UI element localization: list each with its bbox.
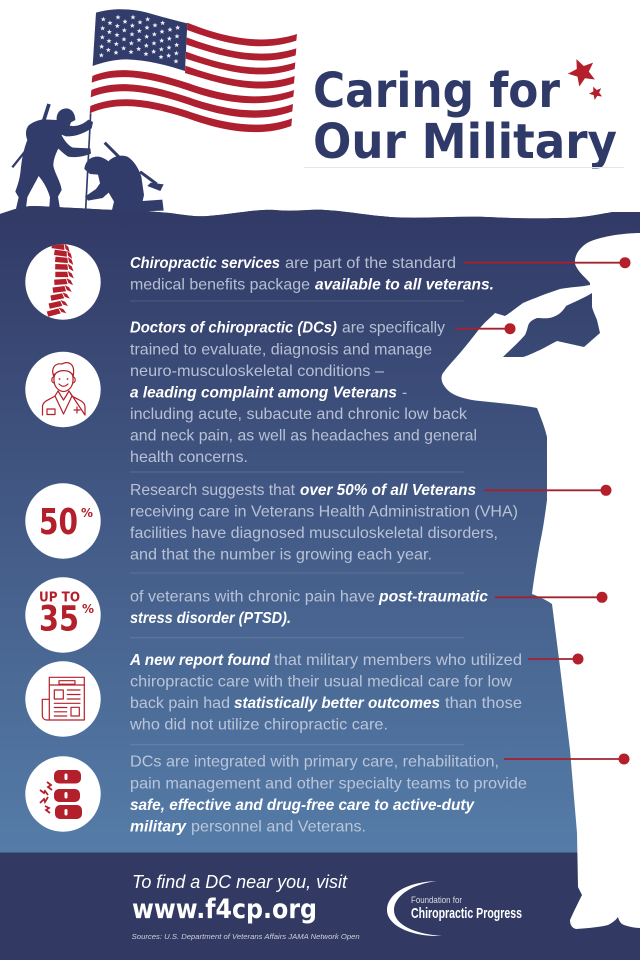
text: chiropractic services: medical benefits package <box>130 276 310 294</box>
logo: foundation for chiropractic progress: Chiropractic Progress <box>411 905 522 922</box>
ground hill <box>0 206 640 222</box>
panel: new report <box>25 652 584 737</box>
footer text: www.f4cp.org <box>132 894 317 925</box>
icon: up to 35 percent badge: UP TO <box>39 591 80 606</box>
text: doctors of chiropractic: are specifically <box>342 320 445 337</box>
red stars <box>568 59 602 100</box>
icon: doctor <box>25 352 101 427</box>
icon: up to 35 percent badge <box>25 577 101 653</box>
footer text <box>132 872 360 941</box>
text: new report: who did not utilize chiropractic care. <box>129 716 388 734</box>
soldier saluting silhouette <box>442 233 640 929</box>
text: research: over 50% of all Veterans <box>300 482 476 499</box>
icon: 50 percent badge: 50 <box>39 502 78 543</box>
icon: spine <box>25 242 101 320</box>
soldiers raising flag <box>12 104 164 212</box>
title underline <box>304 167 624 168</box>
text: ptsd: stress disorder (PTSD). <box>130 610 291 627</box>
panel: chiropractic services <box>25 242 631 320</box>
footer text: To find a DC near you, visit <box>132 872 348 892</box>
callout line <box>484 485 612 496</box>
text: integrated care: pain management and other specialty teams to provide <box>130 775 527 792</box>
crouching soldier <box>84 156 164 212</box>
text: chiropractic services: are part of the standard <box>285 255 456 272</box>
icon: 50 percent badge: % <box>81 506 93 520</box>
text: new report: that military members who utilized <box>274 652 522 669</box>
flag stripes <box>90 23 297 132</box>
footer band <box>0 852 640 960</box>
text: research: facilities have diagnosed musculoskeletal disorders, <box>130 525 498 542</box>
text: research: Research suggests that <box>130 482 296 499</box>
rifle stock <box>147 183 164 191</box>
title: Caring for <box>313 63 560 119</box>
text: new report: statistically better outcomes <box>234 695 440 712</box>
second rifle <box>12 147 28 167</box>
callout line <box>464 257 630 268</box>
panel: 35 percent <box>25 577 608 653</box>
text: doctors of chiropractic: neuro-musculoskeletal conditions – <box>130 363 384 380</box>
rifle on back <box>44 104 49 121</box>
panel: doctors of chiropractic <box>25 320 516 466</box>
text: doctors of chiropractic <box>130 320 477 466</box>
text: new report: chiropractic care with their usual medical care for low <box>130 674 513 690</box>
text: research: receiving care in Veterans Health Administration (VHA) <box>130 504 518 520</box>
callout line <box>495 592 608 603</box>
standing soldier <box>15 108 93 209</box>
icon: newspaper <box>25 661 101 737</box>
text: doctors of chiropractic: and neck pain, as well as headaches and general <box>130 428 477 444</box>
flag stars <box>99 15 180 63</box>
text: integrated care: safe, effective and drug-free care to active-duty <box>130 797 475 814</box>
text: integrated care: personnel and Veterans. <box>191 818 366 836</box>
text: chiropractic services: Chiropractic services <box>130 255 280 272</box>
title: Our Military <box>313 114 617 170</box>
panel: 50 percent <box>25 482 612 564</box>
logo: foundation for chiropractic progress <box>387 881 522 936</box>
text: doctors of chiropractic: trained to evaluate, diagnosis and manage <box>130 341 432 358</box>
icon: 50 percent badge <box>25 483 101 559</box>
text: doctors of chiropractic: including acute, subacute and chronic low back <box>130 406 467 423</box>
text: research: and that the number is growing each year. <box>130 546 432 564</box>
flag canton <box>93 9 187 71</box>
text: ptsd: of veterans with chronic pain have <box>130 589 375 606</box>
text: chiropractic services <box>130 255 494 294</box>
text: new report: back pain had <box>130 695 230 712</box>
text: doctors of chiropractic: Doctors of chiropractic (DCs) <box>130 320 337 337</box>
panel: integrated care <box>25 754 630 836</box>
icon: up to 35 percent badge: 35 <box>39 600 79 640</box>
american flag <box>90 9 297 132</box>
text: ptsd <box>130 589 488 627</box>
footer text: Sources: U.S. Department of Veterans Affairs JAMA Network Open <box>132 932 360 941</box>
crouching soldier rifle <box>105 143 157 184</box>
logo: foundation for chiropractic progress: Foundation for <box>411 895 462 905</box>
text: new report: A new report found <box>129 652 270 669</box>
text: new report: than those <box>445 695 522 712</box>
title <box>313 63 617 170</box>
text: doctors of chiropractic: a leading complaint among Veterans <box>130 384 397 402</box>
text: new report <box>129 652 522 734</box>
callout line <box>528 654 584 664</box>
callout line <box>504 754 630 764</box>
text: integrated care: DCs are integrated with primary care, rehabilitation, <box>130 754 499 771</box>
text: doctors of chiropractic: - <box>402 384 407 402</box>
text: integrated care <box>130 754 527 836</box>
callout line <box>455 323 516 334</box>
flag pole <box>86 113 91 209</box>
text: ptsd: post-traumatic <box>378 589 488 606</box>
text: chiropractic services: available to all veterans. <box>315 276 494 294</box>
icon: up to 35 percent badge: % <box>82 602 94 616</box>
text: doctors of chiropractic: health concerns. <box>130 449 248 466</box>
icon: vertebrae <box>25 756 101 832</box>
text: research <box>130 482 518 564</box>
background panel <box>0 206 640 960</box>
text: integrated care: military <box>130 818 187 836</box>
